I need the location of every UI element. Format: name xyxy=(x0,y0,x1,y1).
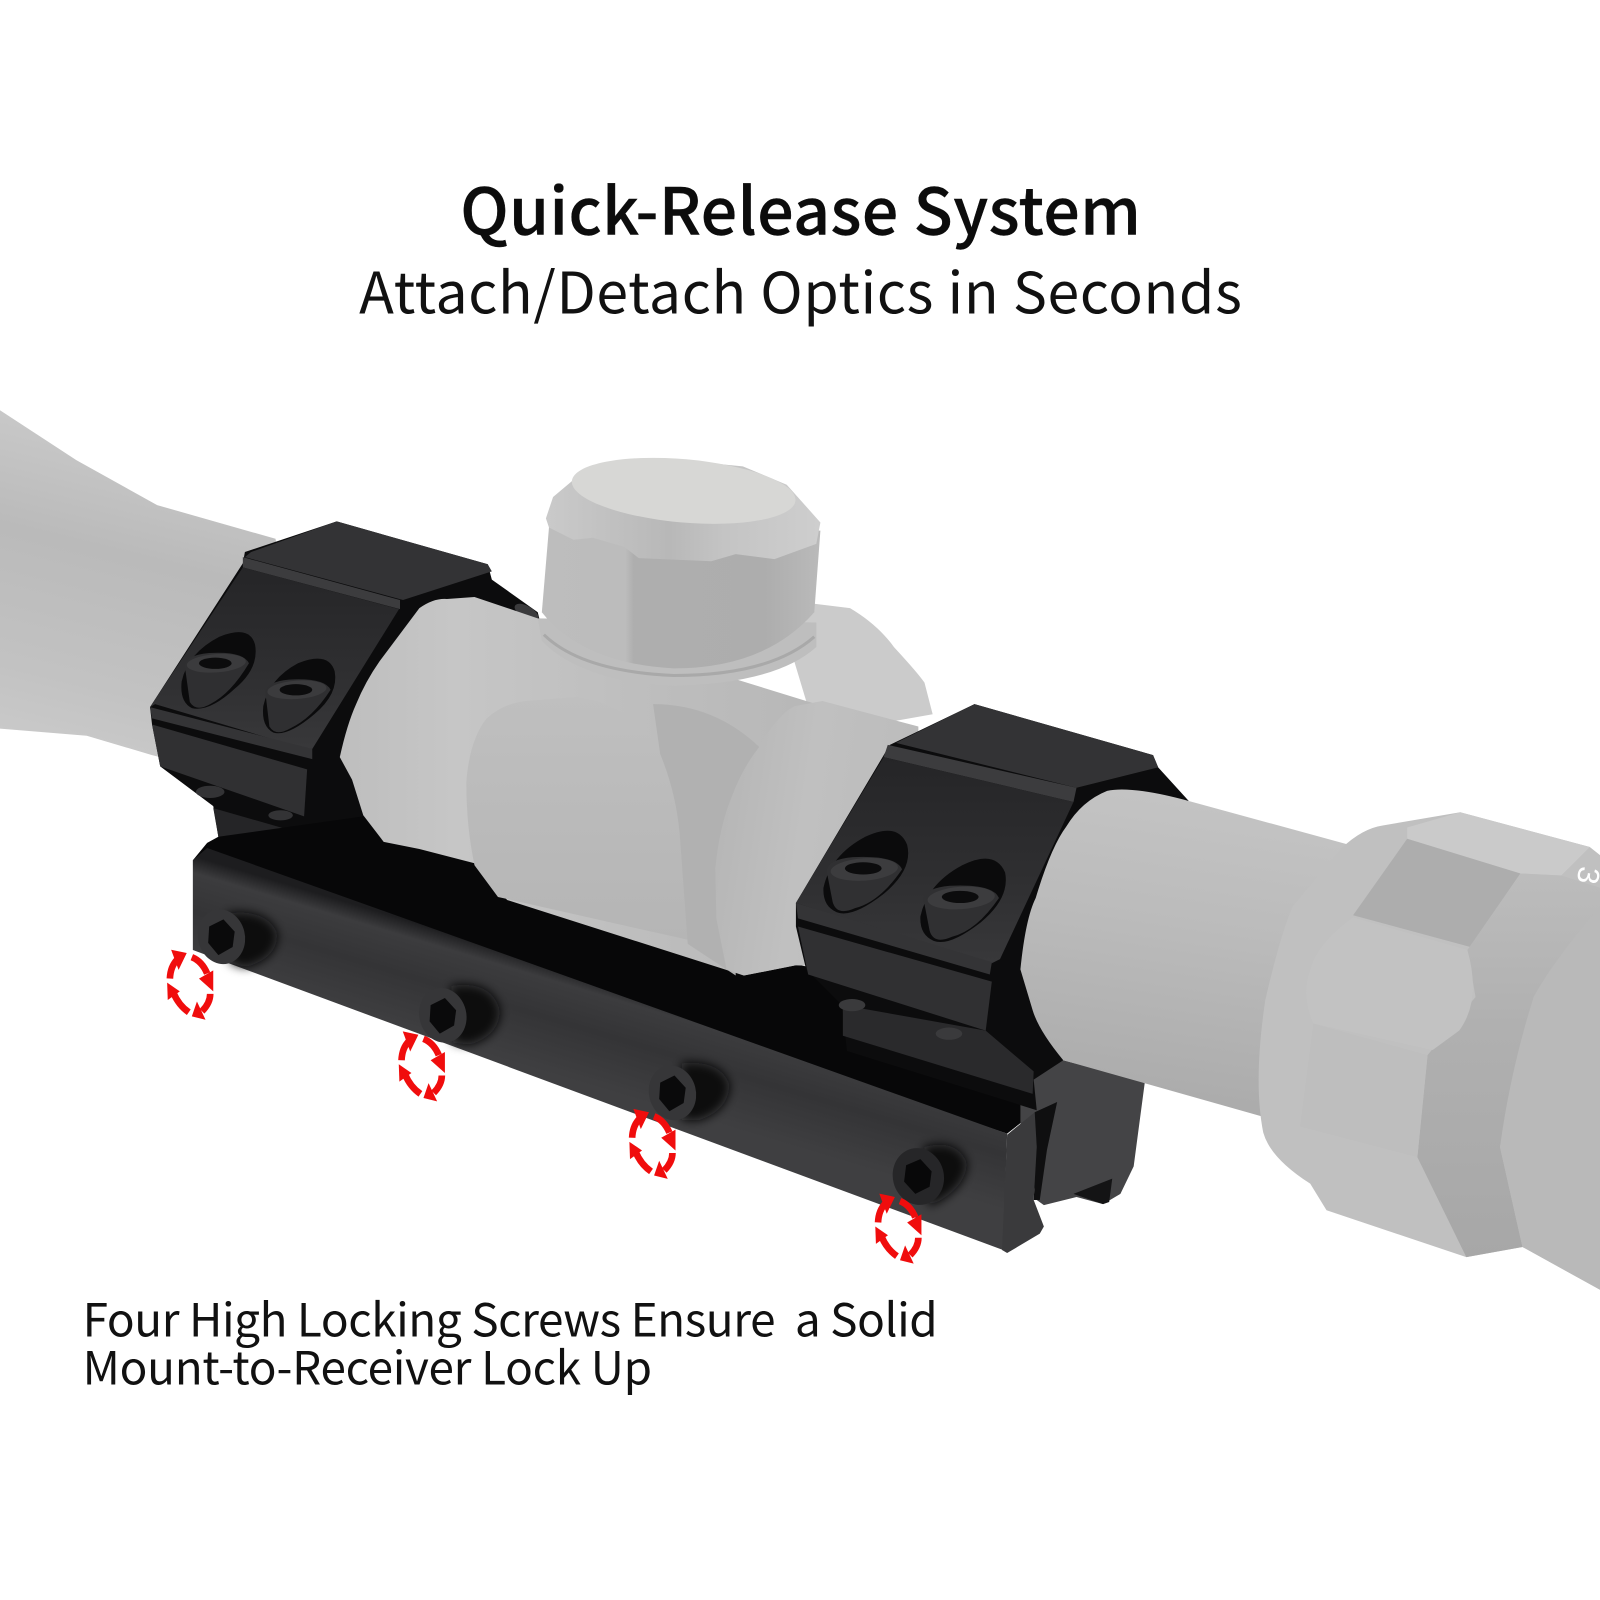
scope tube: right xyxy=(1020,790,1357,1128)
scope turret lobe xyxy=(466,697,688,940)
right ring front face xyxy=(796,757,1073,964)
ocular top band xyxy=(1407,812,1590,876)
caption xyxy=(83,1285,938,1399)
left ring small screws xyxy=(196,786,224,798)
rail end face xyxy=(1002,1112,1044,1253)
left ring lower lip xyxy=(150,707,312,759)
scope side knob xyxy=(776,599,933,735)
right ring small screws xyxy=(839,999,962,1040)
right ring lower stem xyxy=(843,1005,1034,1094)
right ring ridge xyxy=(884,745,1077,802)
knob body xyxy=(542,528,820,668)
rail back shadow xyxy=(193,816,1037,1134)
right ring socket screws xyxy=(823,831,1006,942)
dovetail notch xyxy=(1073,1179,1112,1204)
ocular darker panel xyxy=(1353,839,1520,947)
rail screws xyxy=(192,904,967,1210)
eyepiece xyxy=(1500,906,1600,1290)
left ring top face xyxy=(245,521,492,600)
left ring mount xyxy=(150,521,541,898)
scope ocular xyxy=(1259,812,1600,1290)
left ring socket screws xyxy=(181,632,335,733)
rail end slot xyxy=(1034,1102,1057,1200)
screw 4 xyxy=(887,1143,967,1210)
ocular silhouette xyxy=(1259,812,1600,1290)
left ring ear screw xyxy=(512,600,541,624)
left ring front face xyxy=(150,567,399,749)
scope top knob xyxy=(538,450,820,686)
right base block xyxy=(1020,1060,1145,1205)
title: Quick-Release System xyxy=(460,160,1141,254)
scope tube: left xyxy=(0,410,306,786)
subtitle: Attach/Detach Optics in Seconds xyxy=(359,248,1242,330)
left ring clamp xyxy=(152,724,307,816)
left ring silhouette xyxy=(150,521,541,898)
knob lip xyxy=(538,618,816,686)
scope centre tube xyxy=(340,597,918,976)
right ring top face xyxy=(896,704,1158,788)
ocular dark band xyxy=(1417,873,1600,1257)
left ring stem xyxy=(213,808,363,877)
ocular light blob xyxy=(1306,917,1473,1050)
rotation arrows: screw 4 xyxy=(875,1194,921,1264)
screw 1 xyxy=(192,904,278,969)
scope centre valley xyxy=(653,704,759,976)
rotation arrows: screw 1 xyxy=(167,950,213,1020)
mounting rail xyxy=(193,848,1007,1250)
rotation arrows: screw 3 xyxy=(629,1109,676,1179)
right ring clamp xyxy=(798,927,992,1031)
right ring lower lip xyxy=(796,903,992,974)
knob lip shadow xyxy=(544,635,814,676)
caption: Mount-to-Receiver Lock Up xyxy=(83,1333,652,1399)
screw 2 xyxy=(413,983,500,1048)
right ring silhouette xyxy=(796,704,1189,1110)
rotation arrows: screw 2 xyxy=(399,1031,445,1101)
ocular lower face xyxy=(1300,1023,1428,1157)
knob cap top xyxy=(569,450,798,532)
knob cap band xyxy=(546,459,820,561)
left ring ridge xyxy=(243,557,400,609)
caption: Four High Locking Screws Ensure a Solid xyxy=(83,1285,938,1351)
screw 3 xyxy=(643,1060,730,1125)
scope right barrel xyxy=(715,701,918,976)
